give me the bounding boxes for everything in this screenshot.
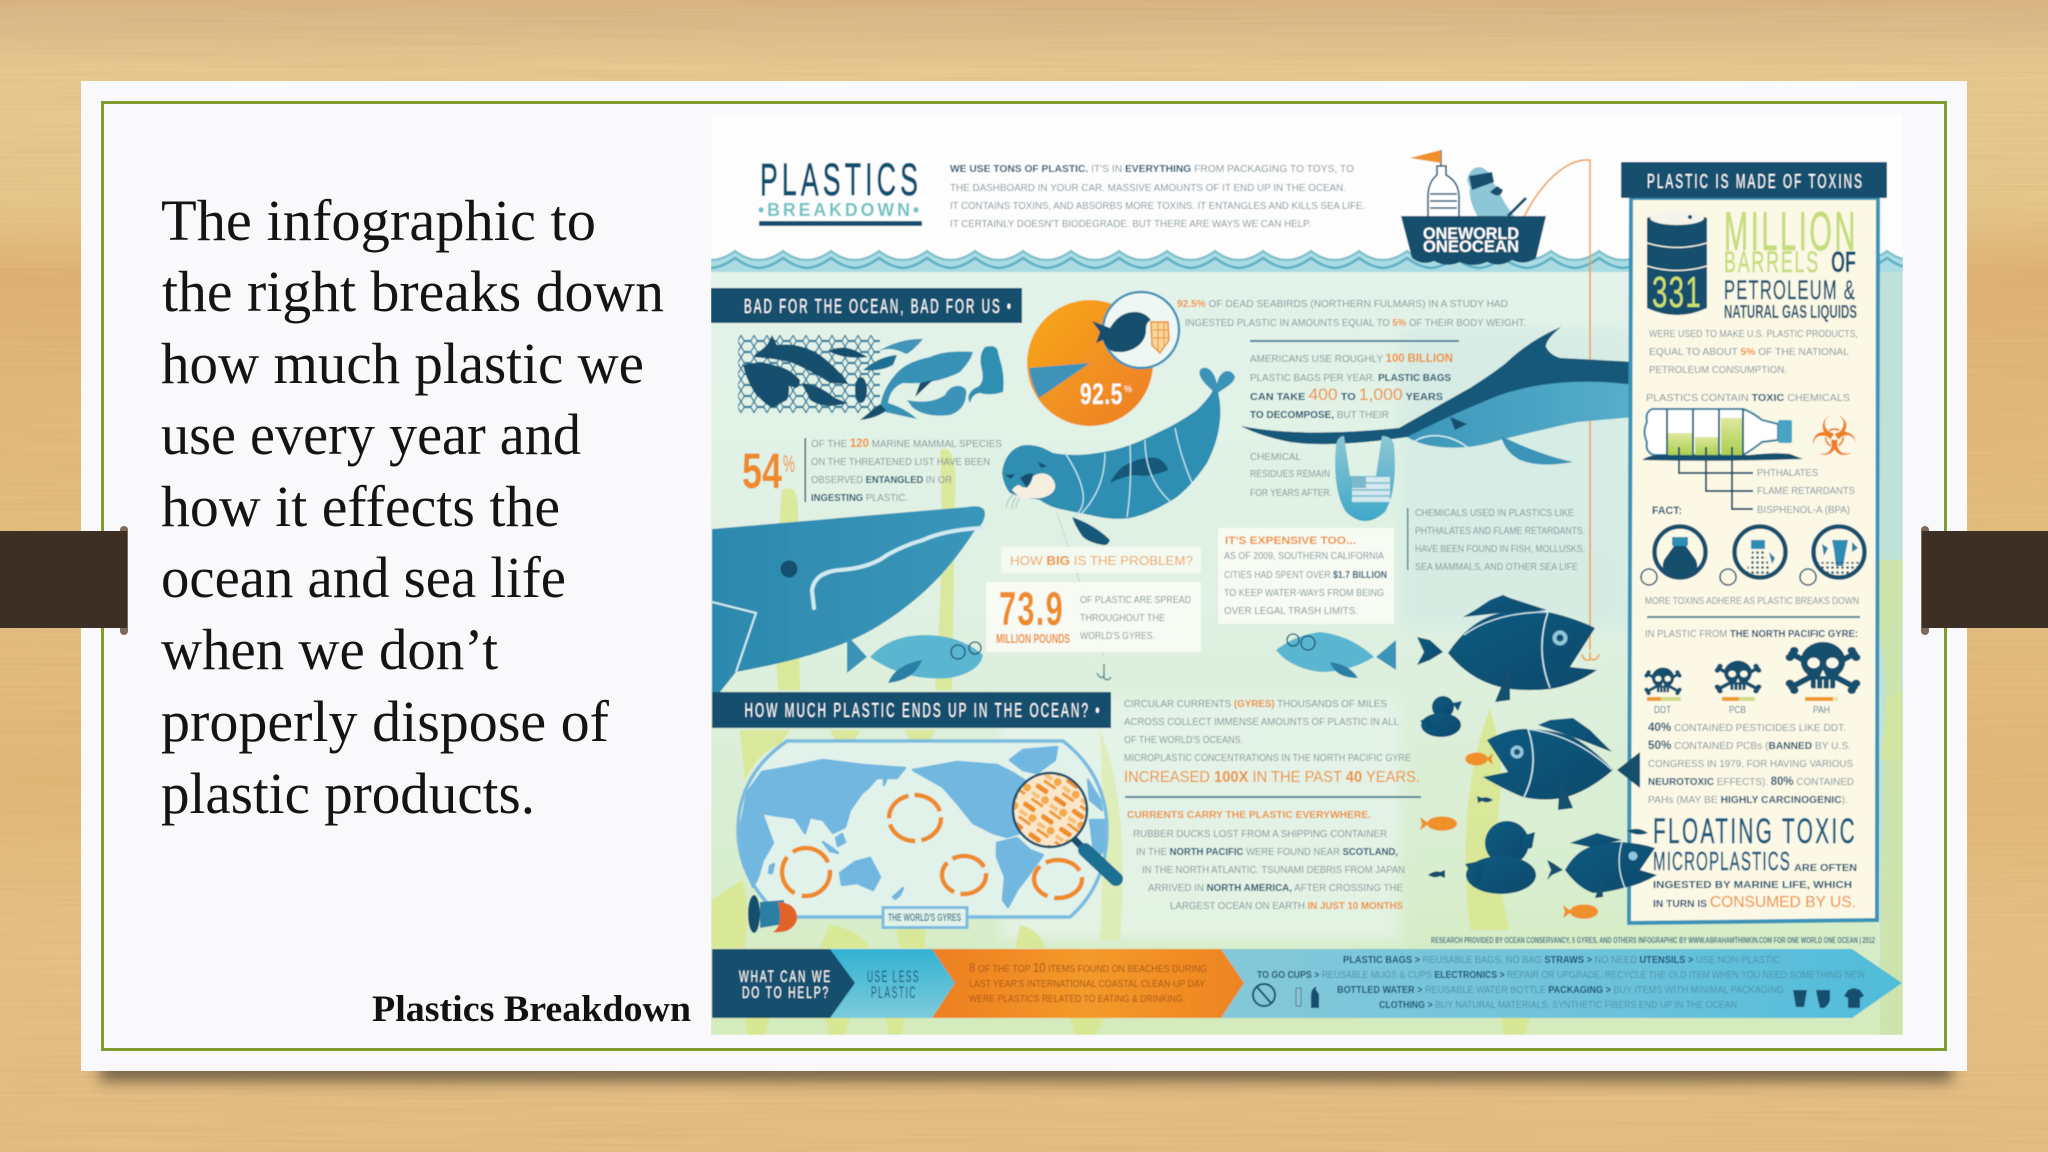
- alternatives list: PLASTIC BAGS > REUSABLE BAGS, NO BAG STRAWS > NO NEED UTENSILS > USE NON-PLASTIC: [1343, 954, 1780, 966]
- intro text: THE DASHBOARD IN YOUR CAR. MASSIVE AMOUNTS OF IT END UP IN THE OCEAN.: [950, 182, 1346, 194]
- pie chart 92.5%: 92.5: [1080, 378, 1123, 411]
- banner: how much plastic: [712, 692, 1111, 728]
- use less plastic: PLASTIC: [871, 983, 917, 1002]
- bottom action bar: USE LESS: [867, 967, 920, 986]
- alternatives list: [1257, 954, 1865, 1011]
- gyres text: [1124, 698, 1420, 786]
- beach stat: LAST YEAR'S INTERNATIONAL COASTAL CLEAN-UP DAY: [969, 979, 1205, 990]
- plastic bag on bill: [1335, 436, 1395, 521]
- body text: how much plastic we: [161, 331, 644, 396]
- currents text: IN THE NORTH ATLANTIC. TSUNAMI DEBRIS FROM JAPAN: [1142, 864, 1405, 876]
- chemicals text: HAVE BEEN FOUND IN FISH, MOLLUSKS,: [1415, 543, 1585, 555]
- stat: 54%: OF THE 120 MARINE MAMMAL SPECIES: [811, 436, 1002, 450]
- title block: [758, 154, 922, 226]
- world map of gyres: [738, 741, 1116, 933]
- chemicals text: CHEMICALS USED IN PLASTICS LIKE: [1415, 507, 1574, 519]
- callout: it's expensive too: CITIES HAD SPENT OVER $1.7 BILLION: [1224, 569, 1387, 581]
- headline: million barrels: [1724, 200, 1858, 322]
- right strap: [1921, 526, 2048, 635]
- duck small: [1420, 696, 1462, 737]
- petroleum text: EQUAL TO ABOUT 5% OF THE NATIONAL: [1649, 346, 1849, 358]
- body text: properly dispose of: [161, 689, 610, 754]
- intro text: [950, 163, 1365, 230]
- stat: 54%: OBSERVED ENTANGLED IN OR: [811, 474, 952, 486]
- currents text: RUBBER DUCKS LOST FROM A SHIPPING CONTAINER: [1133, 828, 1387, 840]
- plastic bag facts: TO DECOMPOSE, BUT THEIR: [1250, 409, 1389, 421]
- barrel with 331: [1647, 211, 1707, 317]
- gyres text: MICROPLASTIC CONCENTRATIONS IN THE NORTH PACIFIC GYRE: [1124, 752, 1411, 764]
- headline: million barrels: BARRELS: [1724, 246, 1820, 279]
- floating toxic microplastics: MICROPLASTICS: [1653, 846, 1791, 876]
- seabird text: 92.5% OF DEAD SEABIRDS (NORTHERN FULMARS) IN A STUDY HAD: [1177, 298, 1508, 310]
- panel: plastic is made of toxins: [1621, 162, 1887, 923]
- title block: •BREAKDOWN•: [758, 200, 922, 220]
- banner: how much plastic: HOW MUCH PLASTIC ENDS UP IN THE OCEAN? •: [744, 700, 1102, 722]
- boat with fisherman: ONEOCEAN: [1423, 237, 1519, 256]
- body text: how it effects the: [161, 474, 560, 539]
- callout: it's expensive too: [1218, 528, 1394, 624]
- body text: when we don’t: [161, 617, 498, 682]
- headline: million barrels: PETROLEUM &: [1724, 275, 1856, 305]
- stat: 54%: 54: [742, 443, 782, 499]
- title block: PLASTICS: [760, 154, 922, 205]
- fish with glasses right: [1276, 632, 1396, 678]
- intro text: IT CONTAINS TOXINS, AND ABSORBS MORE TOXINS. IT ENTANGLES AND KILLS SEA LIFE.: [950, 200, 1365, 212]
- body text: the right breaks down: [162, 259, 664, 324]
- petroleum text: PLASTICS CONTAIN TOXIC CHEMICALS: [1646, 392, 1850, 404]
- alternatives list: TO GO CUPS > REUSABLE MUGS & CUPS ELECTRONICS > REPAIR OR UPGRADE, RECYCLE THE OLD ITEM WHEN YOU NEED SOMETHING NEW: [1257, 969, 1865, 981]
- gyres text: INCREASED 100X IN THE PAST 40 YEARS.: [1124, 769, 1420, 786]
- floating toxic microplastics: ARE OFTEN: [1794, 862, 1857, 874]
- gyre rings: [782, 795, 1082, 898]
- icons: reuse: [1253, 984, 1864, 1008]
- gyres text: CIRCULAR CURRENTS (GYRES) THOUSANDS OF MILES: [1124, 698, 1387, 710]
- plastic bag facts: CAN TAKE 400 TO 1,000 YEARS: [1250, 385, 1443, 404]
- continents: [740, 747, 1104, 907]
- fish two: [1483, 718, 1640, 810]
- chemical labels: [1652, 467, 1855, 517]
- gyres text: ACROSS COLLECT IMMENSE AMOUNTS OF PLASTIC IN ALL: [1124, 716, 1399, 728]
- fishing line: [1524, 160, 1590, 650]
- callout: 73.9 million pounds: 73.9: [999, 582, 1064, 635]
- marlin illustration: [1241, 327, 1635, 465]
- floating toxic microplastics: [1653, 812, 1857, 911]
- chemicals text: [1407, 507, 1585, 573]
- floating toxic microplastics: FLOATING TOXIC: [1653, 812, 1857, 851]
- callout: it's expensive too: AS OF 2009, SOUTHERN CALIFORNIA: [1224, 550, 1384, 562]
- hook: [1097, 664, 1111, 680]
- pollutant text: CONGRESS IN 1979, FOR HAVING VARIOUS: [1648, 758, 1853, 770]
- stat: 54%: [742, 436, 1002, 504]
- beach stat: 8 OF THE TOP 10 ITEMS FOUND ON BEACHES DURING: [969, 960, 1207, 975]
- callout: 73.9 million pounds: MILLION POUNDS: [996, 632, 1070, 646]
- card shadow: [100, 1052, 1952, 1082]
- chemical labels: FACT:: [1652, 505, 1682, 517]
- duck large: [1465, 821, 1536, 894]
- infographic: [711, 113, 1903, 1035]
- pollutant text: PAHs (MAY BE HIGHLY CARCINOGENIC).: [1648, 794, 1848, 806]
- plastic bag facts: CHEMICAL: [1250, 451, 1301, 463]
- what can we do: WHAT CAN WE: [739, 967, 832, 986]
- seabird text: INGESTED PLASTIC IN AMOUNTS EQUAL TO 5% OF THEIR BODY WEIGHT.: [1185, 317, 1526, 329]
- skull icons with bars: PAH: [1813, 704, 1830, 716]
- what can we do: DO TO HELP?: [742, 983, 830, 1002]
- bottom action bar: [712, 949, 1902, 1018]
- currents text: ARRIVED IN NORTH AMERICA, AFTER CROSSING THE: [1148, 882, 1403, 894]
- seaweed: [712, 449, 1903, 1035]
- bottle diagram: [1642, 409, 1803, 509]
- pollutant text: [1648, 720, 1854, 806]
- fact circles: [1641, 526, 1864, 585]
- image caption: Plastics Breakdown: [372, 989, 691, 1030]
- headline: million barrels: MILLION: [1724, 200, 1858, 262]
- pollutant text: 40% CONTAINED PESTICIDES LIKE DDT.: [1648, 720, 1846, 734]
- plastic bag facts: [1250, 351, 1453, 499]
- icon: biohazard: ☣: [1810, 405, 1858, 468]
- floating toxic microplastics: IN TURN IS CONSUMED BY US.: [1653, 894, 1856, 911]
- banner: bad for the ocean: [711, 288, 1022, 323]
- floating toxic microplastics: INGESTED BY MARINE LIFE, WHICH: [1653, 879, 1852, 891]
- body text: use every year and: [161, 402, 581, 467]
- currents text: [1127, 809, 1405, 912]
- body text: ocean and sea life: [161, 545, 566, 610]
- pipe spilling trash: [748, 895, 797, 933]
- body text: The infographic to: [161, 188, 596, 253]
- intro text: IT CERTAINLY DOESN'T BIODEGRADE. BUT THERE ARE WAYS WE CAN HELP.: [950, 218, 1311, 230]
- body text: [161, 188, 664, 826]
- panel: plastic is made of toxins: PLASTIC IS MADE OF TOXINS: [1647, 171, 1864, 193]
- chemical labels: FLAME RETARDANTS: [1757, 485, 1855, 497]
- plastic bag facts: PLASTIC BAGS PER YEAR. PLASTIC BAGS: [1250, 372, 1451, 384]
- fish three: [1547, 833, 1657, 898]
- barrel with 331: 331: [1652, 268, 1702, 317]
- fish with glasses left: [847, 635, 983, 683]
- callout: it's expensive too: IT'S EXPENSIVE TOO...: [1225, 535, 1356, 547]
- petroleum text: [1646, 328, 1858, 404]
- stat: 54%: %: [783, 451, 795, 478]
- credit line: RESEARCH PROVIDED BY OCEAN CONSERVANCY, 5 GYRES, AND OTHERS INFOGRAPHIC BY WWW.ABRAHAMTHINKIN.COM FOR ONE WORLD ONE OCEAN | 2012: [1431, 936, 1875, 945]
- callout: it's expensive too: OVER LEGAL TRASH LIMITS.: [1224, 605, 1358, 617]
- pollutant text: NEUROTOXIC EFFECTS). 80% CONTAINED: [1648, 774, 1854, 788]
- skull icons with bars: [1644, 642, 1860, 716]
- headline: million barrels: NATURAL GAS LIQUIDS: [1724, 302, 1857, 322]
- callout: 73.9 million pounds: WORLD'S GYRES.: [1080, 630, 1155, 642]
- chemical labels: BISPHENOL-A (BPA): [1757, 504, 1850, 516]
- pie chart 92.5%: %: [1124, 384, 1132, 394]
- chemicals text: PHTHALATES AND FLAME RETARDANTS.: [1415, 525, 1585, 537]
- callout: how big is the problem: [1001, 547, 1201, 573]
- alternatives list: CLOTHING > BUY NATURAL MATERIALS, SYNTHETIC FIBERS END UP IN THE OCEAN: [1379, 999, 1737, 1011]
- gyres text: OF THE WORLD'S OCEANS.: [1124, 734, 1243, 746]
- currents text: IN THE NORTH PACIFIC WERE FOUND NEAR SCOTLAND,: [1136, 846, 1398, 858]
- callout: it's expensive too: TO KEEP WATER-WAYS FROM BEING: [1224, 587, 1384, 599]
- plastic bag facts: RESIDUES REMAIN: [1250, 468, 1330, 480]
- currents text: CURRENTS CARRY THE PLASTIC EVERYWHERE.: [1127, 809, 1371, 821]
- illustration: animals in net: [735, 333, 1004, 420]
- body text: plastic products.: [161, 761, 535, 826]
- callout: 73.9 million pounds: OF PLASTIC ARE SPREAD: [1080, 594, 1191, 606]
- beach stat: WERE PLASTICS RELATED TO EATING & DRINKING.: [969, 994, 1185, 1005]
- petroleum text: PETROLEUM CONSUMPTION.: [1649, 364, 1787, 376]
- petroleum text: WERE USED TO MAKE U.S. PLASTIC PRODUCTS,: [1649, 328, 1858, 340]
- callout: 73.9 million pounds: THROUGHOUT THE: [1080, 612, 1165, 624]
- skull icons with bars: DDT: [1654, 704, 1671, 716]
- small fish school: [1420, 752, 1648, 919]
- stat: 54%: ON THE THREATENED LIST HAVE BEEN: [811, 456, 990, 468]
- chemicals text: SEA MAMMALS, AND OTHER SEA LIFE: [1415, 561, 1578, 573]
- callout: how big is the problem: HOW BIG IS THE PROBLEM?: [1010, 554, 1193, 568]
- sea lion entangled: [1002, 368, 1235, 657]
- label: the world's gyres: [883, 908, 967, 928]
- intro text: WE USE TONS OF PLASTIC. IT'S IN EVERYTHING FROM PACKAGING TO TOYS, TO: [950, 163, 1354, 175]
- beach stat: [969, 960, 1207, 1005]
- toxins caption: MORE TOXINS ADHERE AS PLASTIC BREAKS DOWN: [1645, 595, 1859, 607]
- use less plastic: [867, 967, 920, 1002]
- skull icons with bars: PCB: [1729, 704, 1746, 716]
- fish one, eating hook: [1417, 595, 1599, 702]
- left strap: [0, 526, 128, 635]
- north pacific gyre line: IN PLASTIC FROM THE NORTH PACIFIC GYRE:: [1645, 628, 1858, 640]
- chemical labels: PHTHALATES: [1757, 467, 1818, 479]
- plastic bag facts: AMERICANS USE ROUGHLY 100 BILLION: [1250, 351, 1453, 365]
- seabird text: [1177, 298, 1526, 329]
- pie chart 92.5%: [1027, 292, 1179, 426]
- stat: 54%: INGESTING PLASTIC.: [811, 492, 908, 504]
- boat with fisherman: [1401, 150, 1546, 265]
- alternatives list: BOTTLED WATER > REUSABLE WATER BOTTLE PACKAGING > BUY ITEMS WITH MINIMAL PACKAGING: [1337, 984, 1784, 996]
- whale: [712, 506, 985, 692]
- plastic bag facts: FOR YEARS AFTER.: [1250, 487, 1332, 499]
- currents text: LARGEST OCEAN ON EARTH IN JUST 10 MONTHS: [1170, 900, 1403, 912]
- banner: bad for the ocean: BAD FOR THE OCEAN, BAD FOR US •: [744, 296, 1013, 318]
- label: the world's gyres: THE WORLD'S GYRES: [888, 912, 961, 924]
- slide card: [81, 81, 1967, 1071]
- magnifying glass: [1013, 773, 1116, 879]
- pollutant text: 50% CONTAINED PCBs (BANNED BY U.S.: [1648, 738, 1851, 752]
- headline: million barrels: OF: [1831, 246, 1856, 279]
- what can we do: [739, 967, 832, 1002]
- callout: 73.9 million pounds: [986, 582, 1201, 652]
- boat with fisherman: ONEWORLD: [1423, 224, 1519, 243]
